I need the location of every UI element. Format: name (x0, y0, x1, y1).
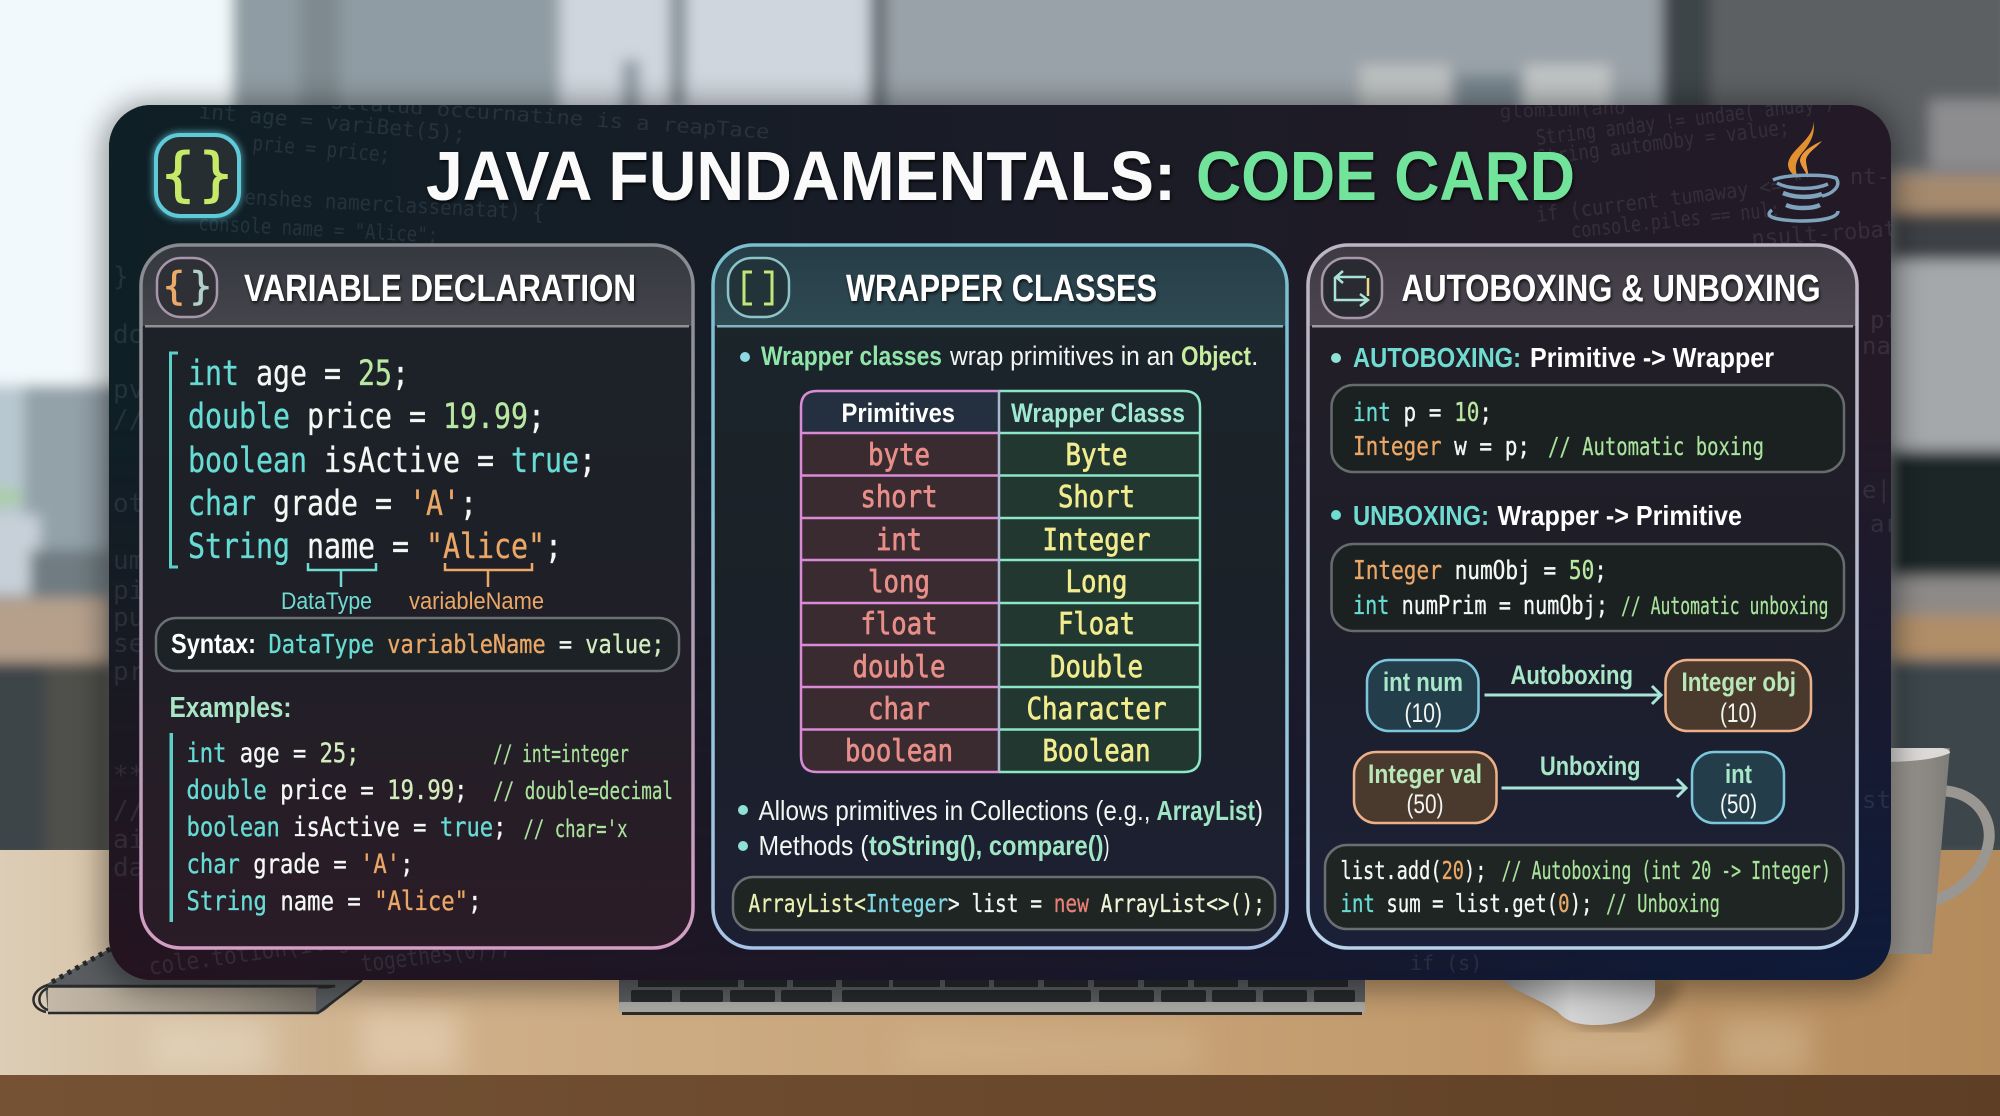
text: unboxing definition (1331, 500, 1742, 531)
icon: java cup logo (1769, 121, 1838, 221)
table: primitives and wrapper classes: byte (868, 438, 930, 473)
text: wrapper classes definition: . (1251, 341, 1259, 371)
code block: examples: char grade = 'A'; (186, 849, 414, 880)
faint background code: pi (113, 576, 144, 606)
title: CODE CARD (1196, 137, 1575, 215)
faint background code: } (113, 262, 129, 292)
faint background code: pu (113, 603, 144, 633)
table: primitives and wrapper classes (801, 391, 1200, 772)
table: primitives and wrapper classes: Float (1058, 607, 1135, 642)
table: primitives and wrapper classes: Long (1066, 565, 1128, 600)
callout: syntax: Syntax: (171, 628, 256, 659)
code block: unboxing: Integer numObj = 50; (1353, 556, 1607, 586)
code block: unboxing: // Automatic unboxing (1621, 592, 1828, 620)
callout: syntax (156, 618, 679, 671)
faint background code: pv (113, 375, 144, 405)
faint background code: do (113, 320, 144, 350)
code block: examples: String name = "Alice"; (186, 886, 481, 917)
faint background code: if (current tumaway <= " (1535, 170, 1806, 227)
flow: unboxing (1354, 751, 1784, 823)
main code card (109, 89, 1924, 981)
desk reflections (150, 1010, 1810, 1075)
flow: autoboxing: int num (1383, 667, 1463, 697)
text: wrapper class uses: Allows primitives in Collections (e.g., (758, 795, 1150, 826)
flow: unboxing: Integer val (1368, 759, 1482, 789)
flow: autoboxing: (10) (1720, 698, 1757, 728)
flow: autoboxing: (10) (1404, 698, 1442, 728)
annotation: variable name brace (409, 563, 544, 615)
heading: wrapper classes: WRAPPER CLASSES (846, 268, 1157, 310)
text: wrapper classes definition: Wrapper classes (761, 341, 942, 371)
faint background code: e|{ (1862, 476, 1905, 504)
icon: panel braces: { (163, 264, 185, 308)
annotation: datatype brace: DataType (281, 588, 372, 615)
table: primitives and wrapper classes: Double (1050, 650, 1143, 685)
icon: curly braces logo (156, 135, 239, 216)
flow: autoboxing: Autoboxing (1510, 660, 1633, 690)
icon: square brackets (728, 258, 789, 317)
faint background code: nai (1862, 332, 1905, 360)
faint background code: ot (113, 489, 144, 519)
text: autoboxing definition (1331, 342, 1774, 373)
code block: declarations: char grade = 'A'; (188, 484, 477, 524)
heading: autoboxing and unboxing: AUTOBOXING & UNBOXING (1402, 268, 1820, 310)
text: wrapper class uses (738, 795, 1263, 861)
table: primitives and wrapper classes: int (876, 523, 922, 558)
code block: list examples: int sum = list.get(0); (1340, 889, 1592, 918)
mouse (1502, 978, 1680, 1030)
code block: declarations: boolean isActive = true; (188, 441, 596, 481)
code block: autoboxing: // Automatic boxing (1548, 432, 1764, 461)
text: wrapper class uses: ) (1255, 795, 1263, 826)
code block: declarations (170, 353, 596, 567)
faint background code: // (113, 796, 144, 826)
code block: unboxing: int numPrim = numObj; (1353, 591, 1608, 621)
text: unboxing definition: UNBOXING: (1353, 500, 1489, 531)
faint background code: pf (1870, 306, 1899, 334)
panel: autoboxing and unboxing (1308, 245, 1857, 948)
text: autoboxing definition: Primitive -> Wrapper (1530, 342, 1774, 373)
table: primitives and wrapper classes: Character (1026, 692, 1166, 727)
table: primitives and wrapper classes: Wrapper Classs (1011, 398, 1185, 428)
callout: syntax: DataType variableName = value; (268, 630, 664, 660)
icon: conversion arrows (1322, 258, 1382, 318)
faint background code: int age = variBet(5); (198, 99, 467, 146)
flow: unboxing: int (1725, 759, 1752, 789)
code block: declarations: String name = "Alice"; (188, 527, 562, 567)
code block: examples (170, 733, 673, 922)
title: JAVA FUNDAMENTALS: (426, 137, 1176, 215)
faint background code: ai (113, 825, 144, 855)
icon: panel braces: } (190, 264, 212, 308)
faint background code: da (113, 853, 144, 883)
faint background code: console.piles == nul; (1570, 197, 1781, 243)
faint background code: pr (113, 657, 144, 687)
code block: autoboxing: Integer w = p; (1353, 432, 1530, 462)
faint background code: um (113, 546, 144, 576)
text: wrapper class uses: ) (1104, 830, 1110, 861)
faint background code: enshes namerclassenatat) { (244, 185, 545, 225)
table: primitives and wrapper classes: long (868, 565, 930, 600)
faint background code: String automOby = value; (1535, 115, 1791, 170)
table: primitives and wrapper classes: boolean (845, 734, 953, 769)
code block: arraylist (733, 877, 1275, 930)
faint background code: togethes(0)); (359, 932, 512, 978)
table: primitives and wrapper classes: Integer (1042, 523, 1150, 558)
flow: unboxing: (50) (1720, 789, 1757, 819)
code block: arraylist: ArrayList<Integer> list = new ArrayList<>(); (748, 889, 1265, 918)
table: primitives and wrapper classes: Boolean (1042, 734, 1150, 769)
desk surface (0, 850, 2000, 1076)
faint background code: nt-f (1850, 165, 1903, 190)
code block: list examples: // Unboxing (1606, 889, 1720, 918)
code block: list examples: list.add(20); (1340, 856, 1486, 885)
notebook (33, 945, 362, 1014)
faint background code: ar (1870, 510, 1899, 538)
code block: declarations: double price = 19.99; (188, 397, 545, 437)
faint background code: if (s) (1410, 951, 1482, 975)
faint background code: // (113, 405, 144, 435)
coffee mug (1880, 748, 1989, 954)
annotation: variable name brace: variableName (409, 588, 544, 615)
faint background code: glomium(ano (1499, 97, 1626, 123)
faint background code: se (113, 629, 144, 659)
code block: examples: // char='x (524, 815, 628, 843)
faint background code: sto (1862, 786, 1905, 814)
code block: declarations: int age = 25; (188, 354, 409, 394)
faint background code (113, 89, 1924, 981)
code block: examples: // int=integer (493, 740, 629, 768)
heading: examples: Examples: (170, 692, 292, 724)
table: primitives and wrapper classes: Primitives (842, 398, 955, 428)
heading: variable declaration: VARIABLE DECLARATION (244, 268, 636, 310)
faint background code: ** (113, 761, 144, 791)
table: primitives and wrapper classes: float (860, 607, 938, 642)
text: autoboxing definition: AUTOBOXING: (1353, 342, 1521, 373)
table: primitives and wrapper classes: double (852, 650, 946, 685)
table: primitives and wrapper classes: short (860, 480, 938, 515)
title (426, 137, 1575, 215)
code block: list examples (1325, 845, 1844, 929)
code block: autoboxing: int p = 10; (1353, 398, 1492, 428)
code block: examples: // double=decimal (493, 777, 673, 805)
text: wrapper class uses: ArrayList (1156, 795, 1255, 826)
icon: curly braces logo: } (199, 140, 233, 208)
code block: examples: boolean isActive = true; (186, 812, 506, 843)
faint background code: sttatud occurnatine is a reapTace (330, 89, 770, 144)
faint background code: console name = "Alice"; (198, 211, 439, 248)
flow: unboxing: Unboxing (1540, 751, 1640, 781)
text: wrapper class uses: Methods ( (758, 830, 869, 861)
text: unboxing definition: Wrapper -> Primitive (1498, 500, 1742, 531)
faint background code: prie = price; (252, 131, 391, 167)
faint background code: nsult-robatis (1751, 215, 1924, 252)
text: wrapper classes definition: wrap primitives in an (949, 341, 1174, 371)
table: primitives and wrapper classes: Byte (1066, 438, 1128, 473)
faint background code: String anday != undae( anday ) (1535, 90, 1835, 150)
text: wrapper classes definition: Object (1181, 341, 1251, 371)
panel: variable declaration (141, 245, 693, 948)
annotation: datatype brace (281, 563, 376, 615)
keyboard (619, 978, 1365, 1015)
table: primitives and wrapper classes: Short (1058, 480, 1135, 515)
flow: autoboxing (1367, 660, 1811, 731)
icon: curly braces logo: { (161, 140, 195, 208)
card shadow (101, 101, 1899, 991)
code block: list examples: // Autoboxing (int 20 -> Integer) (1502, 856, 1831, 885)
faint background code: cole.totion(ilogt.; (147, 920, 388, 981)
icon: panel braces (157, 258, 217, 317)
code block: unboxing (1332, 544, 1844, 631)
flow: unboxing: (50) (1406, 789, 1444, 819)
code block: examples: int age = 25; (186, 738, 360, 769)
text: wrapper classes definition (740, 341, 1259, 371)
table: primitives and wrapper classes: char (868, 692, 930, 727)
text: wrapper class uses: toString(), compare() (869, 830, 1104, 861)
desk front edge (0, 1075, 2000, 1116)
panel: wrapper classes (713, 245, 1287, 948)
code block: autoboxing (1332, 385, 1844, 472)
flow: autoboxing: Integer obj (1682, 667, 1796, 697)
code block: examples: double price = 19.99; (186, 775, 468, 806)
